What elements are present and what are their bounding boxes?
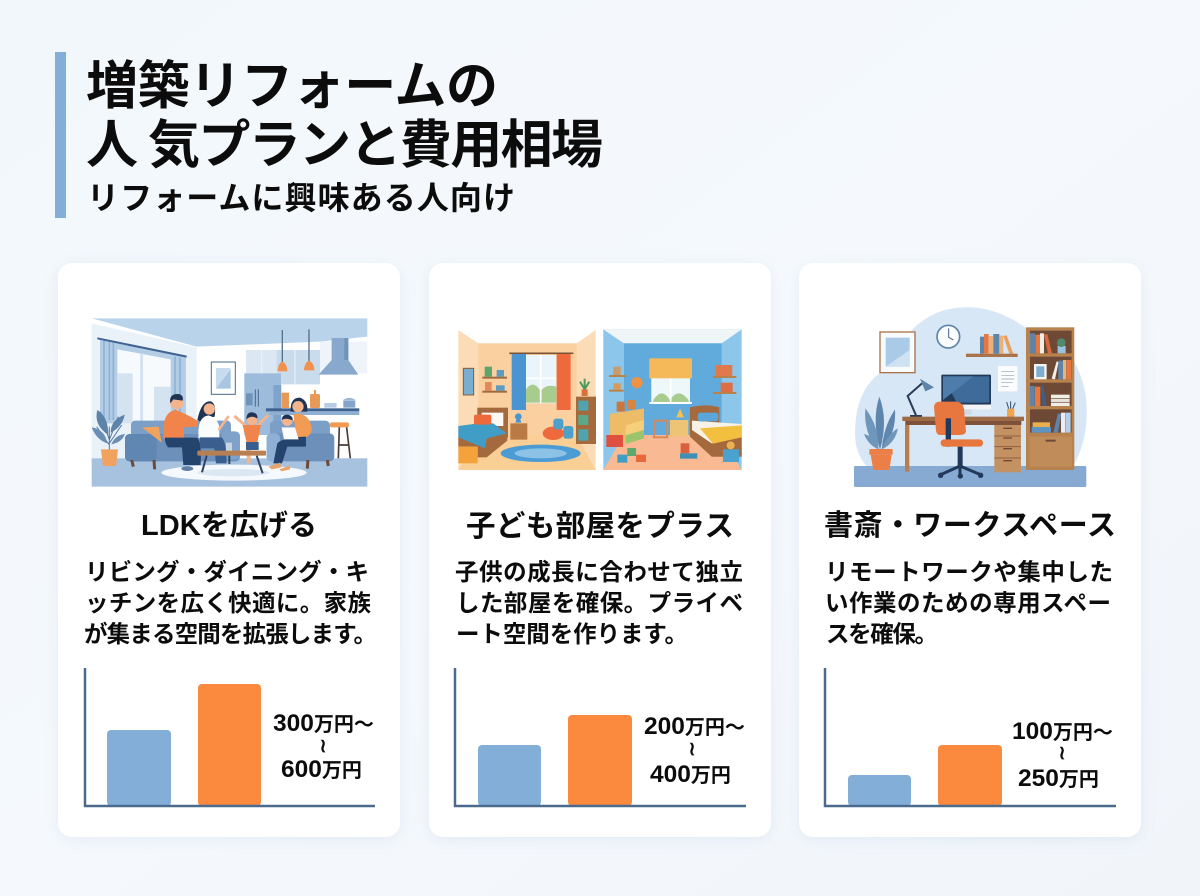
bar chart [825, 668, 1116, 806]
floor [854, 466, 1086, 487]
bar chart [85, 668, 375, 806]
panel: LDK [58, 263, 400, 837]
cost label: 100万円～ [1012, 718, 1113, 745]
heading: LDKを広げる [141, 509, 317, 542]
panel: children's room [429, 263, 771, 837]
wall shelf [966, 334, 1018, 357]
panel: study [799, 263, 1141, 837]
mother [197, 401, 215, 421]
left sofa [131, 421, 231, 446]
clock [937, 325, 960, 348]
description: い作業のための専用スペー [825, 590, 1111, 616]
lamps [282, 329, 309, 363]
title line 1: 増築リフォームの [86, 58, 498, 116]
right armchair [270, 421, 330, 446]
father [163, 410, 198, 439]
bar stool [330, 422, 349, 427]
description: リビング・ダイニング・キ [85, 558, 369, 585]
cost label: 400万円 [650, 761, 731, 788]
desk lamp [908, 379, 934, 416]
picture [211, 362, 235, 394]
card background [429, 263, 771, 837]
description: 子供の成長に合わせて独立 [455, 559, 743, 585]
monitor [941, 375, 991, 415]
bookcase [1026, 327, 1074, 470]
plant [864, 397, 898, 470]
mother with child [291, 398, 307, 412]
description: した部屋を確保。プライベ [456, 590, 743, 616]
coffee table [197, 451, 266, 456]
cost label: 250万円 [1018, 765, 1099, 792]
cost label: 600万円 [281, 756, 362, 783]
description: ッチンを広く快適に。家族 [85, 590, 372, 616]
cost label: ≀ [319, 736, 327, 757]
wall blob [855, 307, 1087, 466]
title line 2: 人 [86, 117, 138, 175]
cost label: ≀ [688, 739, 696, 760]
right room [603, 329, 742, 470]
floor [92, 458, 367, 487]
accent bar [55, 52, 66, 218]
description [84, 558, 377, 647]
description: ート空間を作ります。 [456, 621, 688, 647]
cost label: ≀ [1058, 743, 1066, 764]
description [455, 559, 743, 647]
illustration: two children's rooms [458, 329, 742, 470]
boy standing [234, 415, 268, 427]
left room [458, 330, 596, 470]
description: リモートワークや集中した [825, 559, 1113, 585]
illustration: family in living room [92, 318, 367, 487]
bar chart [455, 668, 746, 806]
range hood [319, 338, 358, 375]
heading: 書斎・ワークスペース [824, 509, 1116, 542]
card background [58, 263, 400, 837]
title line 2: 気プランと費用相場 [148, 117, 603, 175]
plant [92, 410, 125, 466]
subtitle: リフォームに興味ある人向け [87, 180, 515, 216]
description: が集まる空間を拡張します。 [84, 620, 377, 647]
cost label [644, 713, 745, 788]
cost label [273, 710, 374, 783]
description [825, 559, 1113, 647]
pencil cup [1007, 401, 1015, 417]
window [100, 339, 186, 423]
description: スを確保。 [826, 621, 938, 647]
heading: 子ども部屋をプラス [466, 510, 734, 543]
office chair [934, 402, 983, 479]
desk [902, 417, 1024, 472]
picture frame [880, 332, 915, 373]
note [998, 366, 1017, 391]
cost label: 300万円～ [273, 710, 374, 737]
child on lap [282, 415, 293, 426]
illustration: home office [854, 307, 1087, 487]
card background [799, 263, 1141, 837]
title block [55, 52, 603, 218]
cost label [1012, 718, 1113, 792]
counter [266, 408, 359, 411]
cost label: 200万円～ [644, 713, 745, 740]
cabinets and fridge [246, 350, 319, 384]
